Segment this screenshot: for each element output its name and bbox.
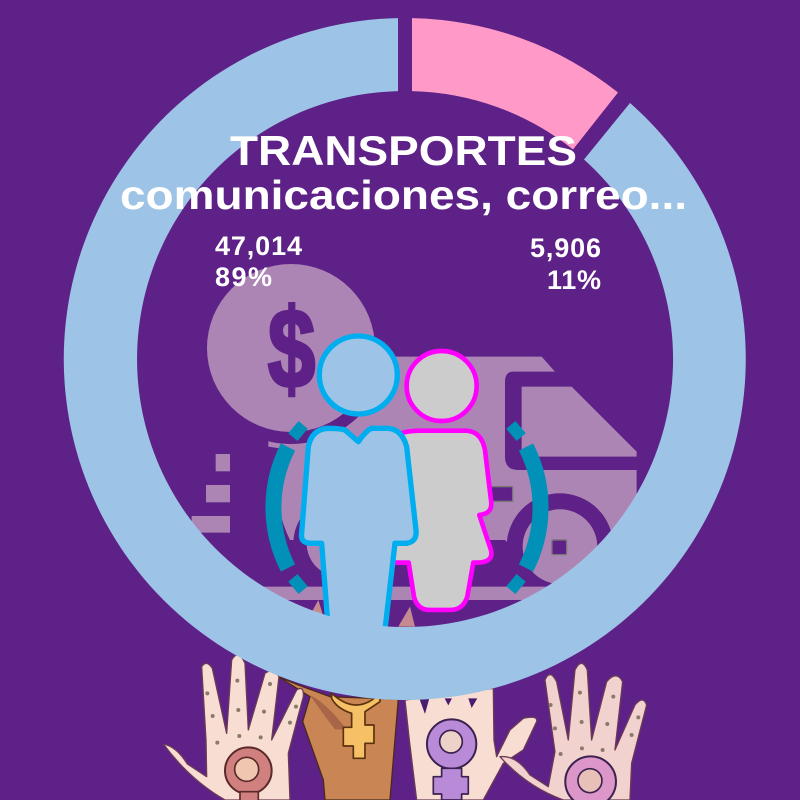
- man figure: [301, 336, 416, 630]
- segment: women 11%: [412, 18, 618, 149]
- women value: 11%: [547, 265, 601, 295]
- hand 2: [278, 677, 398, 800]
- donut chart: [64, 18, 746, 700]
- women value: 5,906: [530, 233, 601, 263]
- dollar coin: [207, 264, 375, 432]
- men value: [215, 231, 302, 292]
- teal bracket arcs: [273, 447, 541, 568]
- dollar sign: $: [268, 287, 315, 412]
- woman figure: [387, 351, 491, 610]
- truck body: [268, 357, 637, 593]
- hand tips seen through the ring: [308, 600, 415, 627]
- truck window: [522, 387, 637, 457]
- segment: men 89%: [64, 18, 746, 700]
- hand 4: [500, 663, 647, 800]
- title: TRANSPORTES: [230, 127, 577, 174]
- illustration: delivery truck and dollar coin: [192, 251, 637, 627]
- hand 3: [405, 688, 537, 800]
- illustration: raised hands with female symbols: [163, 655, 647, 800]
- front wheel: [507, 493, 613, 600]
- men value: 47,014: [215, 231, 302, 261]
- women value: [530, 233, 601, 295]
- coin halo: [194, 251, 388, 444]
- speed lines: [192, 454, 230, 533]
- subtitle: comunicaciones, correo...: [120, 172, 687, 218]
- truck base strip: [263, 587, 550, 600]
- rear wheel: [293, 497, 387, 590]
- men value: 89%: [215, 262, 272, 292]
- teal tick marks: [288, 421, 526, 594]
- hand 1: [163, 655, 303, 800]
- door handle: [490, 487, 513, 501]
